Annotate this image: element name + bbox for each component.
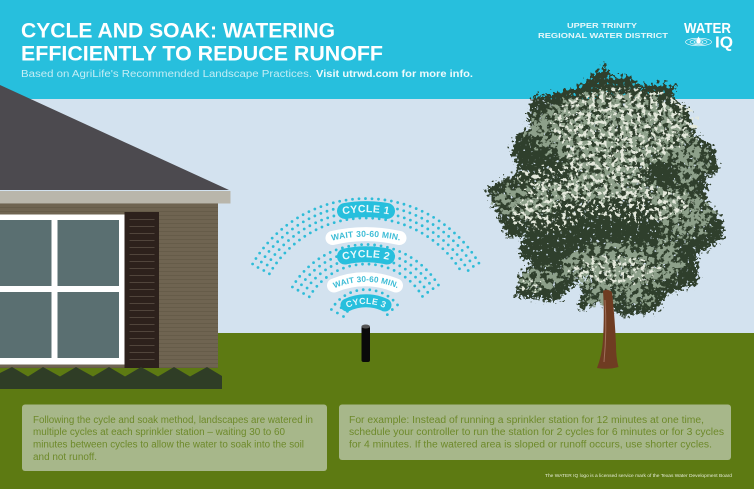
spray arc: outer	[253, 199, 479, 274]
text panel: method: minutes between cycles to allow the water to soak into the soil	[33, 440, 304, 450]
shutter	[124, 212, 159, 368]
brick wall	[0, 203, 218, 368]
spray arc: middle	[292, 245, 440, 297]
header band	[0, 0, 754, 99]
lawn	[0, 333, 754, 489]
district name: REGIONAL WATER DISTRICT	[538, 31, 669, 40]
label: cycle 3: CYCLE 3	[346, 298, 386, 308]
shrubs	[0, 367, 222, 389]
logo: Water IQ: WATER	[684, 20, 731, 37]
title	[21, 20, 383, 66]
text panel: method: and not runoff.	[33, 452, 97, 463]
text panel: example: For example: Instead of running a sprinkler station for 12 minutes at one time,	[349, 415, 704, 426]
title: CYCLE AND SOAK: WATERING	[21, 20, 335, 42]
tree	[485, 64, 723, 369]
label: cycle 2: CYCLE 2	[342, 250, 390, 260]
roof	[0, 85, 229, 190]
label: wait 30-60 min (first)	[326, 227, 406, 245]
icon: sprinkler head	[361, 324, 370, 362]
label: cycle 3	[340, 294, 392, 312]
roof fascia	[0, 191, 230, 204]
district name: UPPER TRINITY	[567, 21, 637, 30]
label: cycle 2	[337, 246, 395, 264]
canopy	[485, 64, 723, 316]
label: wait 30-60 min (second): WAIT 30-60 MIN.	[332, 276, 398, 288]
text panel: method: Following the cycle and soak method, landscapes are watered in	[33, 415, 313, 426]
label: wait 30-60 min (second)	[327, 272, 403, 292]
text panel: example: schedule your controller to run the station for 2 cycles for 6 minutes or for 3 cycles	[349, 427, 724, 438]
window	[0, 214, 124, 364]
label: cycle 1	[337, 201, 395, 219]
footnote: The WATER IQ logo is a licensed service mark of the Texas Water Development Board	[545, 473, 733, 478]
title: EFFICIENTLY TO REDUCE RUNOFF	[21, 42, 383, 66]
sky	[0, 99, 754, 334]
logo: Water IQ: IQ	[715, 34, 733, 52]
house	[0, 85, 230, 389]
subtitle: Visit utrwd.com for more info.	[316, 69, 473, 80]
trunk	[597, 290, 618, 369]
logo: Water IQ	[684, 20, 733, 52]
text panel: example	[339, 404, 731, 460]
subtitle: Based on AgriLife's Recommended Landscape Practices.	[21, 69, 312, 80]
text panel: method: multiple cycles at each sprinkler station – waiting 30 to 60	[33, 427, 285, 438]
label: wait 30-60 min (first): WAIT 30-60 MIN.	[330, 230, 400, 240]
text panel: example: for 4 minutes. If the watered area is sloped or runoff occurs, use shorter cycles.	[349, 440, 712, 450]
spray arc: inner	[331, 290, 401, 316]
label: cycle 1: CYCLE 1	[342, 204, 389, 214]
text panel: method	[22, 404, 327, 471]
subtitle	[21, 69, 473, 80]
district name	[538, 21, 669, 40]
